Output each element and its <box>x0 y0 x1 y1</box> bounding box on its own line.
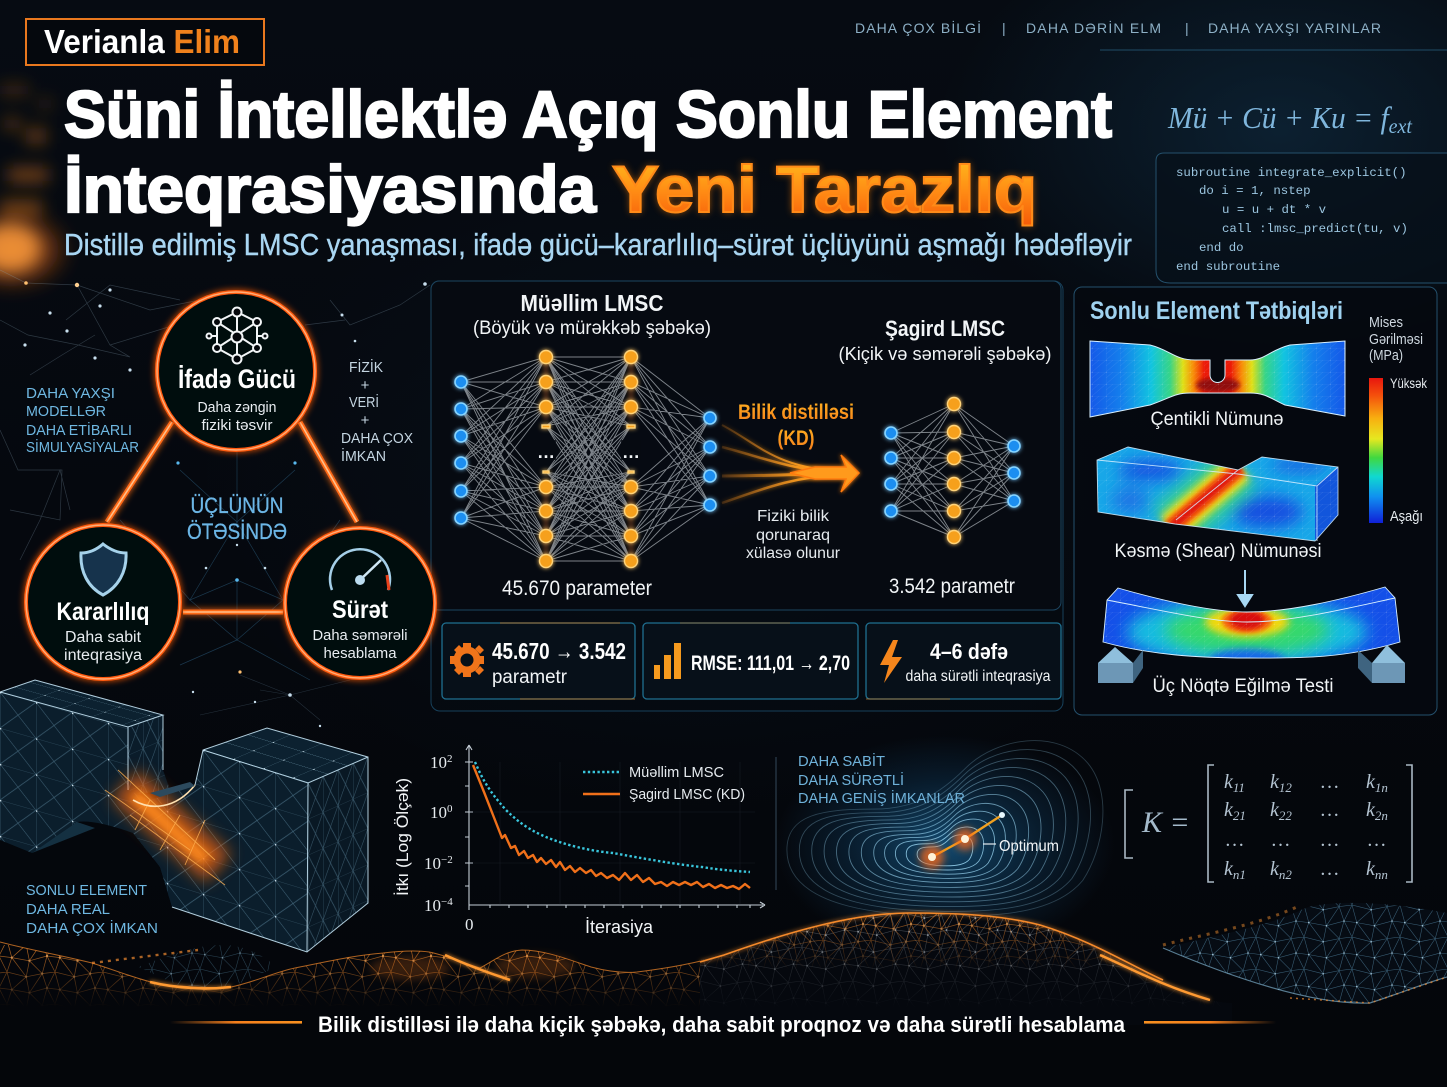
teacher heading: (Böyük və mürəkkəb şəbəkə) <box>473 318 711 339</box>
student heading: Şagird LMSC <box>885 316 1005 341</box>
stiffness matrix: n2 <box>1279 867 1292 882</box>
stiffness matrix: … <box>1272 829 1290 851</box>
axis tick labels: 0 <box>465 915 474 934</box>
blue mesh hump left <box>138 945 277 987</box>
panel heading: Sonlu Element Tətbiqləri <box>1090 297 1343 325</box>
distillation note <box>746 508 840 562</box>
student parameter count: 3.542 parametr <box>889 575 1015 598</box>
brand logo <box>26 19 264 65</box>
left callout: SİMULYASİYALAR <box>26 438 139 456</box>
legend: Mises stress scale <box>1369 315 1428 525</box>
right block <box>133 728 368 952</box>
distillation label: (KD) <box>778 427 814 450</box>
stat card: speed-up: 4–6 dəfə <box>930 639 1008 664</box>
top navigation: | <box>1002 20 1006 36</box>
circle: stability: Kararlılıq <box>56 598 150 626</box>
student heading: (Kiçik və səmərəli şəbəkə) <box>838 344 1052 364</box>
axis tick labels: 0 <box>447 803 453 815</box>
shear specimen <box>1096 446 1338 561</box>
right callout: + <box>361 412 370 429</box>
orange mesh ridges left <box>0 942 721 1005</box>
stiffness matrix <box>1125 765 1412 882</box>
centre label: ÖTƏSİNDƏ <box>187 519 287 544</box>
right callout: FİZİK <box>349 358 383 376</box>
main title: Süni İntellektlə Açıq Sonlu Element <box>64 77 1112 151</box>
axis tick labels: −4 <box>441 896 453 908</box>
icon: speedometer <box>330 549 390 590</box>
circle: stability <box>26 525 180 679</box>
centre label: ÜÇLÜNÜN <box>190 493 284 518</box>
stiffness matrix: … <box>1321 858 1339 880</box>
legend: Mises stress scale: Yüksək <box>1390 375 1428 391</box>
circle: speed: hesablama <box>324 645 397 662</box>
y axis title: İtkı (Log Ölçək) <box>393 778 412 896</box>
chart legend <box>583 764 745 803</box>
stiffness matrix: 21 <box>1233 808 1246 823</box>
code snippet panel: u = u + dt * v <box>1222 203 1327 217</box>
stiffness matrix: nn <box>1375 867 1388 882</box>
code snippet panel: end do <box>1199 241 1244 255</box>
code snippet panel: subroutine integrate_explicit() <box>1176 166 1407 180</box>
axis tick labels: 2 <box>447 753 452 765</box>
circle: expressive power: fiziki təsvir <box>202 418 273 434</box>
dome mesh centre <box>698 908 1217 1004</box>
stiffness matrix: k <box>1224 771 1233 793</box>
top navigation: DAHA YAXŞI YARINLAR <box>1208 20 1381 36</box>
stat card: RMSE <box>643 623 858 699</box>
icon: gear <box>450 643 484 677</box>
main title: Yeni Tarazlıq <box>612 152 1037 226</box>
three point bending specimen <box>1095 580 1410 697</box>
student heading <box>838 316 1052 364</box>
circle: expressive power: İfadə Gücü <box>178 364 296 394</box>
distillation note: xülasə olunur <box>746 545 840 562</box>
stiffness matrix: 22 <box>1279 808 1292 823</box>
student curve <box>473 765 750 889</box>
stiffness matrix: k <box>1366 771 1375 793</box>
stiffness matrix: 2n <box>1375 808 1388 823</box>
optimisation path <box>932 815 1002 857</box>
circle: stability: inteqrasiya <box>64 647 142 664</box>
contour optimisation landscape: Optimum <box>999 838 1059 855</box>
top navigation: DAHA DƏRİN ELM <box>1026 19 1161 36</box>
loss chart <box>393 745 765 937</box>
student network <box>885 398 1020 544</box>
triangle connectors <box>107 422 357 612</box>
block callout: DAHA ÇOX İMKAN <box>26 919 158 937</box>
finite element block model <box>0 680 368 952</box>
block callout <box>26 882 158 937</box>
centre label <box>187 493 287 544</box>
panel: finite element applications <box>1074 287 1437 715</box>
circle: speed <box>285 528 435 678</box>
top navigation <box>855 19 1447 50</box>
teacher heading: Müəllim LMSC <box>520 290 664 316</box>
top navigation: | <box>1185 20 1189 36</box>
right callout: VERİ <box>349 393 379 411</box>
left callout: MODELLƏR <box>26 403 106 420</box>
icon: lightning <box>880 640 902 683</box>
equation of motion: ext <box>1389 114 1413 138</box>
legend: Mises stress scale: Gərilməsi <box>1369 332 1423 348</box>
teacher curve <box>475 762 750 872</box>
code snippet panel: end subroutine <box>1176 260 1280 274</box>
teacher parameter count: 45.670 parameter <box>502 577 652 600</box>
stiffness matrix: k <box>1366 799 1375 821</box>
main title: İnteqrasiyasında <box>64 152 597 226</box>
trilemma triangle <box>26 292 435 679</box>
shear specimen: Kəsmə (Shear) Nümunəsi <box>1114 541 1322 562</box>
three point bending specimen: Üç Nöqtə Eğilmə Testi <box>1152 676 1334 697</box>
distillation note: qorunaraq <box>756 527 830 544</box>
stiffness matrix: K = <box>1141 806 1190 839</box>
stiffness matrix: k <box>1366 858 1375 880</box>
axis tick labels: 10 <box>424 896 441 915</box>
stiffness matrix: k <box>1270 858 1279 880</box>
legend: Mises stress scale: (MPa) <box>1369 348 1403 364</box>
stiffness matrix: … <box>1321 799 1339 821</box>
stiffness matrix: 12 <box>1279 780 1292 795</box>
circle: speed: Sürət <box>332 596 389 624</box>
main title: Yeni Tarazlıq <box>612 152 1037 226</box>
top navigation: DAHA ÇOX BİLGİ <box>855 19 981 36</box>
stat card: speed-up <box>866 623 1061 699</box>
teacher network: … <box>622 442 640 462</box>
stiffness matrix: k <box>1270 771 1279 793</box>
supports <box>1098 645 1405 683</box>
stiffness matrix: k <box>1270 799 1279 821</box>
stat card: RMSE: RMSE: 111,01 → 2,70 <box>691 652 850 675</box>
axis tick labels: 10 <box>430 803 447 822</box>
stat card: parameters: 45.670 → 3.542 <box>492 638 626 664</box>
notched specimen: Çentikli Nümunə <box>1150 409 1284 430</box>
left callout: DAHA ETİBARLI <box>26 421 132 439</box>
circle: speed: Daha səmərəli <box>312 627 408 644</box>
equation of motion: Mü + Cü + Ku = f <box>1168 100 1400 135</box>
contour callout <box>798 752 965 807</box>
circle: expressive power: Daha zəngin <box>198 400 276 416</box>
stiffness matrix: … <box>1226 829 1244 851</box>
code snippet panel <box>1156 153 1447 283</box>
axis tick labels: 10 <box>424 854 441 873</box>
terrain mesh <box>0 903 1447 1025</box>
distillation note: Fiziki bilik <box>757 508 829 525</box>
legend: Mises stress scale: Aşağı <box>1390 508 1423 525</box>
main title <box>64 77 1112 226</box>
circle: stability: Daha sabit <box>65 629 142 646</box>
right callout: DAHA ÇOX <box>341 430 413 447</box>
block callout: DAHA REAL <box>26 901 110 918</box>
icon: bars <box>654 643 681 679</box>
contour optimisation landscape <box>775 735 1115 955</box>
axis tick labels: −2 <box>441 854 453 866</box>
stiffness matrix: 1n <box>1375 780 1388 795</box>
subtitle: Distillə edilmiş LMSC yanaşması, ifadə gücü–kararlılıq–sürət üçlüyünü aşmağı hədəfləyir <box>64 227 1132 262</box>
legend: Mises stress scale: Mises <box>1369 315 1403 331</box>
distillation label: Bilik distilləsi <box>738 401 854 424</box>
icon: shield <box>81 544 126 595</box>
bokeh lights top left <box>0 84 74 294</box>
contour callout: DAHA SÜRƏTLİ <box>798 771 904 789</box>
stiffness matrix: n1 <box>1233 867 1246 882</box>
distillation label <box>738 401 854 450</box>
teacher network <box>455 350 716 568</box>
distillation arrow <box>722 425 859 503</box>
block callout: SONLU ELEMENT <box>26 882 147 899</box>
left block <box>0 680 195 907</box>
stat card: parameters: parametr <box>492 667 568 688</box>
right callout <box>341 358 413 465</box>
teacher heading <box>473 290 711 339</box>
bottom caption: Bilik distilləsi ilə daha kiçik şəbəkə, daha sabit proqnoz və daha sürətli hesablama <box>318 1012 1126 1037</box>
teacher network: … <box>537 442 555 462</box>
x axis title: İterasiya <box>585 917 654 937</box>
stiffness matrix: k <box>1224 858 1233 880</box>
contour callout: DAHA GENİŞ İMKANLAR <box>798 789 965 807</box>
blue mesh hill right <box>1163 903 1447 1003</box>
stiffness matrix: 11 <box>1233 780 1245 795</box>
icon: network <box>206 308 268 364</box>
right callout: + <box>361 377 370 394</box>
left callout: DAHA YAXŞI <box>26 385 115 402</box>
load arrow <box>1238 570 1252 606</box>
notched specimen <box>1090 340 1346 429</box>
chart legend: Şagird LMSC (KD) <box>629 786 745 803</box>
panel: knowledge distillation <box>431 281 1063 711</box>
brand logo: Verianla Elim <box>44 23 240 60</box>
axis tick labels <box>424 753 474 934</box>
stress hot zone <box>105 770 225 885</box>
stiffness matrix: … <box>1368 829 1386 851</box>
axis tick labels: 10 <box>430 753 447 772</box>
stat card: parameters <box>442 623 635 699</box>
stiffness matrix: … <box>1321 771 1339 793</box>
circle: expressive power <box>157 292 315 450</box>
right callout: İMKAN <box>341 447 386 465</box>
code snippet panel: call :lmsc_predict(tu, v) <box>1222 222 1408 236</box>
stat card: speed-up: daha sürətli inteqrasiya <box>906 668 1051 685</box>
stiffness matrix: … <box>1321 829 1339 851</box>
contour callout: DAHA SABİT <box>798 752 885 770</box>
left callout <box>26 385 139 456</box>
chart legend: Müəllim LMSC <box>629 764 724 781</box>
code snippet panel: do i = 1, nstep <box>1199 184 1311 198</box>
stiffness matrix: k <box>1224 799 1233 821</box>
